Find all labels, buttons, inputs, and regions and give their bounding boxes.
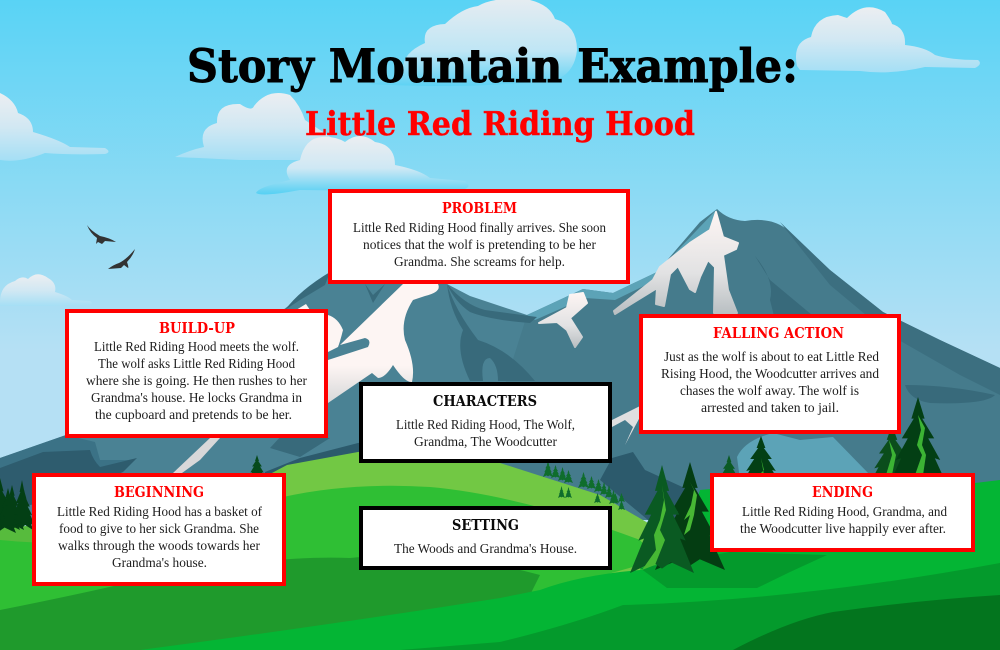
snow: middle peak <box>539 293 587 347</box>
tree: behind beginning box <box>248 455 266 480</box>
panel: falling action: FALLING ACTION <box>713 325 844 342</box>
darkest green corner <box>733 595 1000 650</box>
dark shading: right slope band <box>780 222 1000 395</box>
snow: lower right streak <box>612 406 640 445</box>
dark ridge behind hill <box>265 440 380 490</box>
panel: build-up: BUILD-UP <box>159 320 235 337</box>
snow: streak below build-up <box>173 438 220 473</box>
panel: build-up: the cupboard and pretends to be her. <box>95 407 292 422</box>
lower left dark foothill <box>0 450 137 510</box>
panel: beginning <box>34 475 284 584</box>
tree ground shadow <box>640 552 827 588</box>
trees: behind ending box <box>718 436 781 486</box>
snow: small left patch <box>296 304 310 310</box>
light green hill <box>200 445 680 600</box>
light sunlit streak <box>565 565 640 590</box>
dark shading: right peak streak <box>755 256 830 330</box>
panel: characters <box>361 384 610 461</box>
right mountain <box>480 209 1000 520</box>
cloud: left of subtitle <box>175 93 340 160</box>
dark foothill centre right <box>600 452 720 540</box>
panel: ending: Little Red Riding Hood, Grandma, and <box>742 504 947 519</box>
medium green slope <box>400 563 1000 650</box>
tree: right tall pair <box>868 397 948 487</box>
snow: blob beside build-up <box>328 315 343 352</box>
panel: problem <box>330 191 628 282</box>
panel: falling action: Just as the wolf is about to eat Little Red <box>664 349 879 364</box>
cloud: lower left <box>0 274 92 306</box>
cloud: far left <box>0 93 108 161</box>
light ridge edges <box>527 209 717 320</box>
panel: build-up: where she is going. He then rushes to her <box>86 373 307 388</box>
dark shading: left peak crescent <box>447 284 535 381</box>
tree: large pair <box>630 462 725 573</box>
panel: characters: Little Red Riding Hood, The Wolf, <box>396 417 575 432</box>
bird: lower <box>108 249 135 269</box>
panel: setting <box>361 508 610 568</box>
panel: characters: CHARACTERS <box>433 393 537 410</box>
trees: small on light hill <box>543 461 625 510</box>
mountain range <box>0 209 1000 540</box>
panel: falling action: Rising Hood, the Woodcutter arrives and <box>661 366 879 381</box>
panel: ending <box>712 475 973 550</box>
panel: characters: Grandma, The Woodcutter <box>414 434 557 449</box>
panel: falling action: chases the wolf away. The wolf is <box>680 383 859 398</box>
panel: beginning: BEGINNING <box>114 484 204 501</box>
panel: ending: ENDING <box>812 484 873 501</box>
panel: setting: The Woods and Grandma's House. <box>394 541 577 556</box>
cloud: below subtitle <box>256 136 468 194</box>
panel: falling action <box>641 316 899 432</box>
panel: build-up <box>67 311 326 436</box>
bright green foreground <box>140 480 1000 650</box>
dark shading: right slope patch <box>905 385 995 403</box>
snow: right peak <box>614 212 738 314</box>
light inner patch <box>482 358 498 381</box>
bird: upper <box>87 225 116 244</box>
dark green band <box>0 555 540 650</box>
panel: build-up: Grandma's house. He locks Grandma in <box>91 390 302 405</box>
panel: problem: Grandma. She screams for help. <box>394 254 565 269</box>
panel: falling action: arrested and taken to jail. <box>701 400 839 415</box>
panel: problem: Little Red Riding Hood finally arrives. She soon <box>353 220 606 235</box>
panel: beginning: Grandma's house. <box>112 555 207 570</box>
panel: build-up: The wolf asks Little Red Riding Hood <box>98 356 295 371</box>
mid dark patch under build-up <box>270 435 330 457</box>
title: Story Mountain Example: <box>187 39 798 93</box>
hills <box>0 445 1000 650</box>
panel: setting: SETTING <box>452 517 519 534</box>
panel: beginning: food to give to her sick Grandma. She <box>59 521 259 536</box>
cloud: top right <box>796 7 980 72</box>
far right green hill <box>650 480 1000 650</box>
small left ground <box>0 520 100 560</box>
panel: beginning: walks through the woods towards her <box>58 538 261 553</box>
cloud: top centre <box>368 0 577 86</box>
panel: ending: the Woodcutter live happily ever after. <box>740 521 946 536</box>
panel: beginning: Little Red Riding Hood has a basket of <box>57 504 262 519</box>
trees: left forest <box>0 478 35 533</box>
subtitle: Little Red Riding Hood <box>305 104 695 143</box>
panel: build-up: Little Red Riding Hood meets the wolf. <box>94 339 299 354</box>
mid green hill <box>0 486 700 650</box>
lower left foothill <box>0 435 135 500</box>
dark V under problem box <box>365 284 385 303</box>
light blue patch right <box>737 433 870 480</box>
dark shading: left peak band <box>447 284 537 323</box>
panel: problem: notices that the wolf is pretending to be her <box>363 237 597 252</box>
snow: main left peak <box>328 284 439 403</box>
panel: problem: PROBLEM <box>442 200 517 217</box>
dark shading: left shoulder <box>285 272 330 310</box>
far left mountain <box>0 270 1000 520</box>
